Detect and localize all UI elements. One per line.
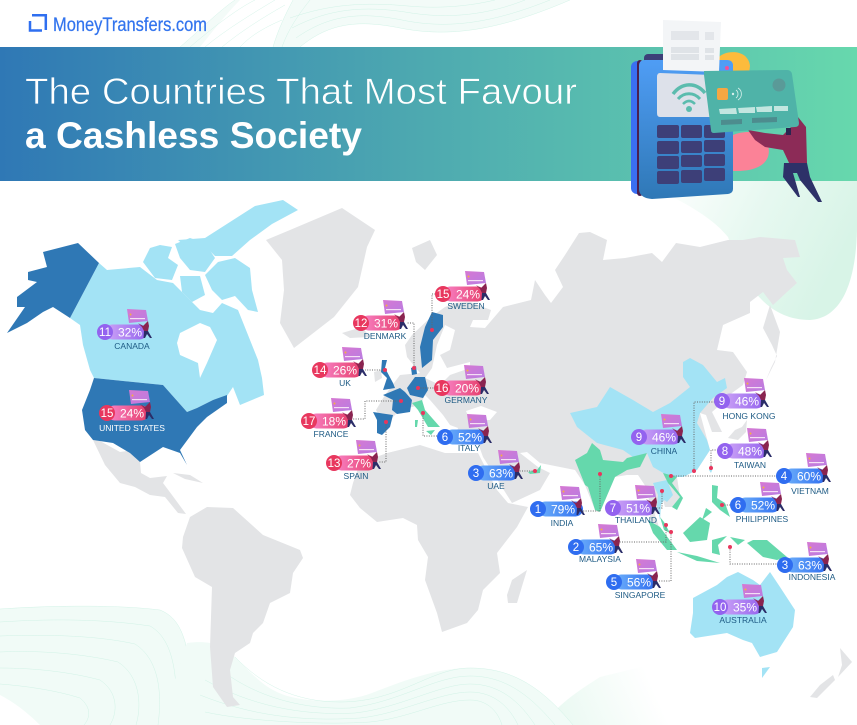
country: Canada [70, 263, 264, 412]
badge: Malaysia: 65% [589, 540, 613, 554]
badge: China: 9 [636, 432, 642, 444]
badge: Indonesia [777, 542, 836, 582]
country: Italy [412, 400, 440, 435]
badge: Germany [434, 365, 489, 405]
badge: Sweden: 24% [456, 288, 480, 302]
sea: Baltic [425, 325, 470, 385]
badge: Denmark: DENMARK [364, 331, 407, 341]
badge: France [301, 398, 356, 439]
badge: Philippines: 6 [735, 500, 741, 512]
country: United States [82, 378, 227, 465]
badge: Germany: 20% [455, 382, 479, 396]
title: a Cashless Society [25, 115, 362, 156]
country: Taiwan [709, 465, 713, 473]
badge: Canada: 11 [99, 327, 111, 339]
country: Germany [407, 377, 428, 398]
badge: Germany: 16 [436, 383, 448, 395]
title: The Countries That Most Favour [25, 71, 577, 112]
badge: UK: UK [339, 378, 351, 388]
badge: UAE: UAE [487, 481, 505, 491]
land: South America [182, 507, 303, 707]
land: New Zealand south island [810, 675, 835, 698]
badge: Indonesia: INDONESIA [789, 572, 836, 582]
badge: Malaysia [568, 524, 623, 564]
illustration: card terminal with person [631, 20, 822, 202]
badge: Indonesia: 3 [782, 560, 788, 572]
badge: UK: 14 [314, 365, 327, 377]
country: Malaysia and Indonesia [648, 517, 787, 563]
header banner [0, 47, 857, 181]
badge: Taiwan [717, 428, 772, 470]
badge: UAE: 3 [473, 468, 479, 480]
badge: France: FRANCE [314, 429, 349, 439]
bottom-left wave pattern [0, 606, 192, 725]
badge: Malaysia: 2 [573, 542, 579, 554]
badge: Philippines: 52% [751, 498, 775, 512]
badge: France: 18% [322, 414, 346, 428]
icon: person [748, 117, 822, 202]
country: China [570, 358, 727, 477]
badge: UK [312, 347, 367, 388]
country: United Kingdom [381, 360, 395, 390]
badge: Taiwan: TAIWAN [734, 460, 766, 470]
badge: Hong Kong: 46% [735, 394, 759, 408]
badge: UAE: 63% [489, 466, 513, 480]
country: Alaska [7, 243, 99, 333]
country: Canada Arctic islands [143, 200, 298, 312]
bottom-right mint background blob [543, 660, 670, 725]
icon: yellow circle [718, 52, 750, 80]
badge: India: 79% [551, 502, 575, 516]
world map [7, 200, 852, 707]
badge: Denmark: 12 [355, 318, 367, 330]
badge: France: 17 [303, 416, 315, 428]
country: Spain [373, 412, 393, 435]
badge: Malaysia: MALAYSIA [579, 554, 621, 564]
badge: Thailand: 51% [626, 502, 650, 516]
badge: Italy: 52% [458, 430, 482, 444]
badge: Canada [97, 309, 152, 351]
badge: United States: 24% [120, 406, 144, 420]
icon: keypad [657, 125, 725, 184]
icon: receipt [663, 20, 721, 72]
land: Svalbard [412, 240, 437, 270]
sea: Black Sea [466, 406, 497, 420]
badge: Denmark [353, 300, 408, 341]
title [25, 71, 577, 156]
badge: Hong Kong [714, 378, 775, 421]
land: Ireland [374, 370, 382, 382]
badge: Hong Kong: 9 [719, 396, 725, 408]
land: Caribbean [173, 473, 203, 483]
leader lines and location pins [353, 294, 778, 581]
badge: Italy: 6 [442, 432, 448, 444]
badge: United States [99, 390, 165, 433]
land: Mexico and Central America [93, 440, 186, 514]
land: Greenland [266, 208, 375, 348]
country: Sweden [420, 312, 443, 368]
land: New Zealand north island [838, 648, 852, 677]
land: Madagascar [507, 570, 527, 603]
badge: Italy: ITALY [458, 443, 481, 453]
badge: Sweden: 15 [437, 289, 449, 301]
badge: Thailand [605, 485, 660, 525]
badge: Sweden [435, 271, 490, 311]
badge: Taiwan: 8 [722, 446, 728, 458]
badge: China: 46% [652, 430, 676, 444]
badge: Spain: 27% [347, 456, 371, 470]
badge: Spain [326, 440, 381, 481]
badge: Canada: 32% [118, 326, 142, 340]
badge: Thailand: THAILAND [615, 515, 657, 525]
top-right mint background blob [640, 181, 857, 320]
badge: Taiwan: 48% [738, 444, 762, 458]
logo: MoneyTransfers.com [53, 14, 207, 36]
badge: China [631, 414, 686, 456]
country: UAE [528, 465, 541, 474]
badge: Canada: CANADA [114, 341, 150, 351]
land: Africa [350, 445, 528, 632]
badge: Philippines [730, 482, 789, 524]
badge: India: INDIA [551, 518, 574, 528]
badge: United States: UNITED STATES [99, 423, 165, 433]
badge: Vietnam: 4 [781, 471, 788, 483]
sea: Mediterranean [355, 420, 480, 462]
badge: United States: 15 [101, 408, 113, 420]
badge: Australia [712, 584, 767, 625]
badge: Sweden: SWEDEN [447, 301, 485, 311]
badge: Singapore: 5 [611, 577, 617, 589]
badge: Germany: GERMANY [445, 395, 488, 405]
country: Tasmania [762, 667, 770, 678]
sea: Hudson Bay [177, 323, 217, 378]
badge: China: CHINA [651, 446, 678, 456]
badge: Australia: 35% [733, 600, 757, 614]
badge: Denmark: 31% [374, 316, 398, 330]
bottom wave pattern [160, 642, 573, 725]
badge: Singapore [606, 559, 666, 600]
badge: Hong Kong: HONG KONG [723, 411, 775, 421]
country: India [575, 443, 647, 512]
badge: Indonesia: 63% [798, 558, 822, 572]
land: Japan [728, 420, 747, 440]
icon: credit card [704, 70, 799, 133]
badge: India [530, 486, 585, 528]
land: Eurasia [376, 232, 800, 530]
badge: Thailand: 7 [610, 503, 616, 515]
country: Vietnam [663, 473, 683, 510]
country: Denmark [411, 366, 417, 375]
badge: Italy [437, 414, 492, 453]
badge: UAE [468, 450, 523, 491]
badge: Singapore: SINGAPORE [615, 590, 666, 600]
badge: Philippines: PHILIPPINES [736, 514, 789, 524]
badge: India: 1 [535, 504, 541, 516]
country: Thailand [653, 480, 673, 520]
country: Australia [690, 572, 795, 657]
badge: Spain: SPAIN [344, 471, 368, 481]
badge: Vietnam: 60% [797, 470, 821, 484]
icon: pink blob [732, 132, 769, 171]
icon: terminal body [631, 54, 733, 199]
badge: Vietnam: VIETNAM [791, 486, 829, 496]
badge: Spain: 13 [328, 458, 340, 470]
land: Sakhalin and Kamchatka strip [763, 305, 780, 380]
badge: Australia: 10 [714, 602, 726, 614]
badge: Vietnam [776, 453, 831, 496]
icon: terminal screen with wifi [657, 73, 712, 117]
top wave pattern [180, 0, 570, 47]
country: Philippines [702, 485, 730, 520]
badge: UK: 26% [333, 364, 357, 378]
land: Iceland [342, 327, 370, 338]
badge: Australia: AUSTRALIA [719, 615, 767, 625]
badge: Singapore: 56% [627, 576, 651, 590]
country: France [383, 388, 412, 414]
